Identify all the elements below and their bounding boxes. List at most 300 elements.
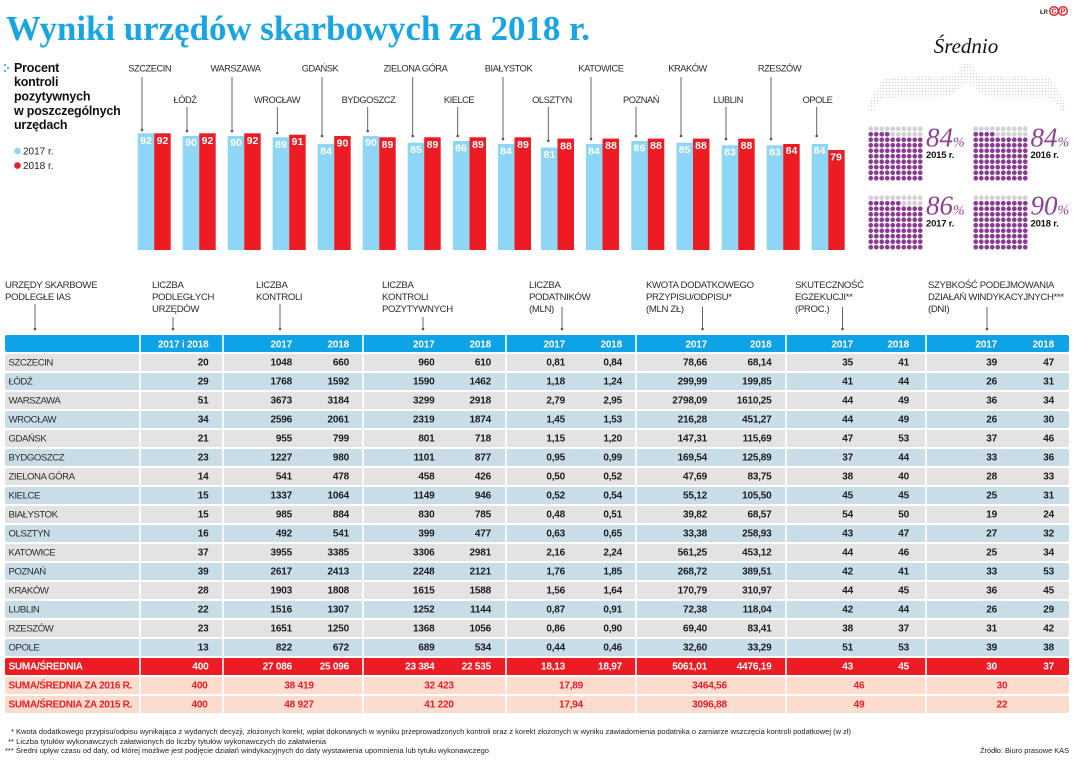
row: Białystok: 985: [276, 510, 293, 520]
row: total: 18,13: [541, 662, 566, 672]
row: Rzeszów: 1651: [271, 624, 293, 634]
row: Wrocław: WROCŁAW: [8, 414, 58, 426]
row: Rzeszów: 38: [842, 624, 854, 634]
row: Katowice: 2,16: [546, 548, 566, 558]
column headings: KWOTA DODATKOWEGO: [646, 280, 754, 291]
row: Warszawa: 2918: [470, 396, 492, 406]
row: Rzeszów: 1056: [470, 624, 492, 634]
row: Warszawa: 36: [986, 396, 998, 406]
row: Olsztyn: 399: [418, 528, 435, 540]
row: Zielona Góra: 33: [1043, 472, 1055, 482]
row: Katowice: 25: [986, 548, 998, 558]
table header row: 2017 i 2018: [158, 340, 209, 350]
row: Olsztyn: 27: [986, 528, 998, 540]
row: Katowice: 2981: [470, 548, 492, 558]
table header row: 2018: [888, 340, 910, 350]
row: Lublin: 42: [842, 604, 854, 616]
bars: Łódź: 92: [202, 135, 213, 147]
row: Warszawa: 3299: [413, 396, 435, 406]
row: Rzeszów: 1250: [328, 624, 350, 634]
row: Białystok: 24: [1043, 510, 1055, 520]
row: Łódź: 1,18: [546, 376, 566, 388]
footnotes: *** Średni upływ czasu od daty, od której możliwe jest podjęcie działań windykacyjnych do daty wystawienia upomnienia lub tytułu wykonawczego: [5, 746, 489, 755]
row: Rzeszów: 42: [1043, 624, 1055, 634]
city labels: BYDGOSZCZ: [342, 95, 396, 105]
row: total: 4476,19: [737, 662, 772, 672]
row: total 2016: [8, 678, 1008, 692]
row: Zielona Góra: 478: [333, 472, 350, 482]
bars: Szczecin: 92: [157, 135, 168, 147]
row: total 2016: 46: [854, 680, 865, 692]
row: total 2016: 38 419: [284, 680, 314, 692]
row: Bydgoszcz: 23: [198, 452, 209, 464]
row: Szczecin: 660: [333, 358, 350, 368]
row: total 2016: 400: [191, 680, 208, 692]
bars: Olsztyn: [541, 139, 574, 250]
row: total: SUMA/ŚREDNIA: [8, 660, 83, 672]
column headings: LICZBA: [152, 280, 184, 291]
row: Poznań: 41: [898, 566, 910, 578]
row: Katowice: KATOWICE: [8, 548, 55, 558]
row: Wrocław: 1874: [470, 414, 492, 426]
row: Kielce: KIELCE: [8, 490, 40, 502]
row: Warszawa: 51: [198, 396, 209, 406]
column headings: [5, 279, 1064, 315]
row: Katowice: 44: [842, 548, 854, 558]
row: Gdańsk: 53: [898, 434, 910, 444]
column headings: LICZBA: [256, 280, 288, 291]
bars: Katowice: [586, 139, 619, 250]
row: total: [8, 660, 1055, 672]
row: total 2016: SUMA/ŚREDNIA ZA 2016 R.: [8, 678, 133, 692]
row: Olsztyn: 16: [198, 528, 209, 540]
row: Kielce: 1149: [414, 490, 435, 502]
row: Opole: 672: [333, 642, 350, 654]
row: Rzeszów: 69,40: [683, 624, 708, 634]
row: Kraków: 1588: [470, 586, 492, 596]
row: Opole: 13: [198, 642, 209, 654]
row: Szczecin: 1048: [271, 358, 293, 368]
row: Warszawa: 1610,25: [737, 396, 772, 406]
row: total: 22 535: [462, 662, 492, 672]
row: Szczecin: 610: [475, 358, 492, 368]
city labels: BIAŁYSTOK: [485, 64, 533, 74]
row: Szczecin: 41: [898, 358, 910, 368]
table header row: 2017: [413, 340, 435, 350]
row: Bydgoszcz: 0,95: [546, 452, 566, 464]
row: Białystok: [8, 510, 1055, 520]
bars: Opole: 84: [814, 145, 825, 157]
row: Opole: 51: [842, 642, 854, 654]
row: Wrocław: 2319: [413, 414, 435, 426]
row: Wrocław: 44: [842, 414, 854, 426]
bars: Rzeszów: [767, 144, 800, 250]
column headings: (PROC.): [795, 304, 829, 315]
row: Kraków: 1,56: [546, 586, 566, 596]
row: Łódź: ŁÓDŹ: [8, 376, 33, 388]
row: Łódź: 199,85: [742, 376, 772, 388]
bars: Lublin: [722, 139, 755, 250]
row: Gdańsk: 37: [986, 434, 998, 444]
row: Zielona Góra: 0,50: [546, 472, 566, 482]
row: total 2016: 3464,56: [692, 680, 728, 692]
row: Kraków: 1,64: [603, 586, 623, 596]
row: Gdańsk: 147,31: [678, 434, 708, 444]
row: Lublin: 0,87: [546, 604, 566, 616]
row: total 2015: 49: [854, 700, 865, 710]
bars: Wrocław: 91: [292, 136, 303, 148]
row: Olsztyn: 47: [898, 528, 910, 540]
row: Kielce: 0,54: [603, 490, 623, 502]
city labels: RZESZÓW: [758, 64, 802, 74]
row: Olsztyn: 541: [333, 528, 350, 540]
bars: Warszawa: [228, 133, 261, 250]
bars: Łódź: [183, 133, 216, 250]
row: Olsztyn: 0,65: [603, 528, 623, 540]
row: Wrocław: 1,53: [603, 414, 623, 426]
row: Gdańsk: 46: [1043, 434, 1055, 444]
bars: Bydgoszcz: [363, 136, 396, 250]
row: Łódź: 31: [1043, 376, 1055, 388]
averages heading: Średnio: [934, 34, 998, 58]
column headings: SZYBKOŚĆ PODEJMOWANIA: [928, 279, 1055, 291]
row: Wrocław: 1,45: [546, 414, 566, 426]
row: total: 23 384: [405, 662, 435, 672]
row: Łódź: 299,99: [678, 376, 708, 388]
value 2018: 90%: [1030, 190, 1069, 220]
bars: Rzeszów: 83: [769, 146, 781, 158]
row: Katowice: 453,12: [742, 548, 772, 558]
value 2016: 84%: [1030, 122, 1069, 152]
row: Poznań: 2617: [271, 566, 293, 578]
row: Zielona Góra: [8, 472, 1055, 482]
city labels: SZCZECIN: [128, 64, 171, 74]
row: total 2015: 22: [997, 700, 1008, 710]
row: Katowice: [8, 548, 1055, 558]
row: Białystok: 785: [475, 510, 492, 520]
row: Szczecin: 35: [842, 358, 854, 368]
row: Bydgoszcz: 37: [842, 452, 854, 464]
row: Rzeszów: 0,86: [546, 624, 566, 634]
bars: Lublin: 83: [724, 146, 736, 158]
row: total 2015: 17,94: [559, 700, 584, 710]
waffle 2016: [973, 126, 1028, 181]
row: total 2016: 30: [997, 680, 1008, 692]
row: Wrocław: 30: [1043, 414, 1055, 426]
row: Kielce: [8, 490, 1055, 502]
column headings: PODATNIKÓW: [529, 292, 592, 303]
row: Wrocław: 2596: [271, 414, 293, 426]
row: Poznań: 42: [842, 566, 854, 578]
row: Rzeszów: 1368: [413, 624, 435, 634]
row: Katowice: 3385: [328, 548, 350, 558]
table header row: 2017: [686, 340, 708, 350]
row: Olsztyn: 0,63: [546, 528, 566, 540]
city labels: KRAKÓW: [668, 64, 707, 74]
row: Rzeszów: [8, 624, 1055, 634]
table header row: 2018: [750, 340, 772, 350]
bars: Zielona Góra: 89: [427, 139, 438, 151]
bars: Katowice: 84: [588, 146, 600, 158]
city leader lines: [141, 77, 818, 142]
chart heading: pozytywnych: [14, 90, 90, 104]
row: Wrocław: 2061: [328, 414, 350, 426]
row: Bydgoszcz: BYDGOSZCZ: [8, 452, 65, 464]
row: Szczecin: 47: [1043, 358, 1055, 368]
row: Poznań: 2121: [470, 566, 492, 578]
row: Lublin: 26: [986, 604, 998, 616]
row: Olsztyn: 258,93: [742, 528, 772, 540]
row: Poznań: 268,72: [678, 566, 708, 578]
column headings: EGZEKUCJI**: [795, 292, 853, 303]
row: Katowice: 46: [898, 548, 910, 558]
row: Lublin: 1144: [470, 604, 492, 616]
row: Zielona Góra: 458: [418, 472, 435, 482]
row: Gdańsk: [8, 434, 1055, 444]
row: Lublin: 1307: [328, 604, 350, 616]
row: Olsztyn: 33,38: [683, 528, 708, 540]
row: Opole: 53: [898, 642, 910, 654]
row: Opole: 689: [418, 642, 435, 654]
value 2017: 86%: [926, 190, 965, 220]
row: Wrocław: 451,27: [742, 414, 772, 426]
bars: Szczecin: [138, 133, 171, 250]
value 2015: 84%: [926, 122, 965, 152]
row: Białystok: BIAŁYSTOK: [8, 510, 59, 520]
row: Kraków: 170,79: [678, 586, 708, 596]
data table: [5, 335, 1069, 713]
table header row: 2018: [601, 340, 623, 350]
row: Kielce: 55,12: [683, 490, 708, 502]
row: Poznań: 53: [1043, 566, 1055, 578]
row: Białystok: 830: [418, 510, 435, 520]
bars: Gdańsk: [318, 136, 351, 250]
row: Katowice: 3955: [271, 548, 293, 558]
row: Bydgoszcz: 33: [986, 452, 998, 464]
column headings: PODLEGŁYCH: [152, 292, 214, 303]
row: Bydgoszcz: 877: [475, 452, 492, 464]
row: Kraków: [8, 586, 1055, 596]
row: Gdańsk: 1,15: [546, 434, 566, 444]
row: Szczecin: 68,14: [747, 358, 772, 368]
row: total: 27 086: [263, 662, 293, 672]
chart heading: w poszczególnych: [13, 104, 121, 118]
column headings: LICZBA: [382, 280, 414, 291]
row: total: 30: [986, 662, 998, 672]
city labels: OPOLE: [803, 95, 833, 105]
row: Rzeszów: 37: [898, 624, 910, 634]
row: Lublin: 72,38: [683, 604, 708, 616]
row: Bydgoszcz: 169,54: [678, 452, 708, 464]
bars: Olsztyn: 81: [544, 149, 555, 161]
waffle 2018: [973, 195, 1028, 250]
row: Opole: 38: [1043, 642, 1055, 654]
row: Szczecin: 78,66: [683, 358, 708, 368]
city labels: LUBLIN: [713, 95, 743, 105]
row: Lublin: 1516: [271, 604, 293, 616]
bars: Warszawa: 92: [247, 135, 258, 147]
row: Kielce: 105,50: [742, 490, 772, 502]
row: Gdańsk: 955: [276, 434, 293, 444]
row: Lublin: 1252: [413, 604, 435, 616]
table header row: 2017: [271, 340, 293, 350]
row: Opole: 39: [986, 642, 998, 654]
row: total 2016: 17,89: [559, 680, 584, 692]
row: Poznań: POZNAŃ: [8, 566, 46, 578]
column headings: SKUTECZNOŚĆ: [795, 279, 864, 291]
bars: Kielce: 89: [472, 139, 484, 151]
row: Olsztyn: 477: [475, 528, 492, 540]
row: Szczecin: SZCZECIN: [8, 358, 53, 368]
bars: Wrocław: [273, 135, 306, 250]
row: Rzeszów: 23: [198, 624, 209, 634]
chart heading: Procent: [14, 61, 60, 75]
row: Kielce: 15: [198, 490, 209, 502]
row: Lublin: 118,04: [743, 604, 772, 616]
row: Olsztyn: 32: [1043, 528, 1055, 540]
row: Rzeszów: 83,41: [747, 624, 772, 634]
chart heading: [4, 61, 121, 132]
row: Wrocław: [8, 414, 1055, 426]
row: Białystok: 54: [842, 510, 854, 520]
row: Białystok: 0,48: [546, 510, 566, 520]
row: Rzeszów: 31: [986, 624, 998, 634]
row: Łódź: 44: [898, 376, 910, 388]
bars: Poznań: [631, 139, 664, 250]
row: Łódź: 1462: [470, 376, 492, 388]
value 2015: 2015 r.: [926, 150, 954, 161]
row: Gdańsk: 1,20: [603, 434, 623, 444]
legend: 2018 r.: [23, 161, 54, 172]
row: Kraków: 45: [1043, 586, 1055, 596]
row: Bydgoszcz: 125,89: [742, 452, 772, 464]
row: Lublin: 0,91: [603, 604, 623, 616]
row: Gdańsk: 21: [198, 434, 209, 444]
row: Opole: 32,60: [683, 642, 708, 654]
row: total: 45: [898, 662, 910, 672]
footnotes: ** Liczba tytułów wykonawczych załatwionych do liczby tytułów wykonawczych do załatwienia: [8, 737, 327, 746]
row: Kielce: 25: [986, 490, 998, 502]
row: Kielce: 0,52: [546, 490, 566, 502]
row: total 2015: [8, 698, 1008, 710]
row: Kraków: 36: [986, 586, 998, 596]
row: Lublin: LUBLIN: [8, 604, 40, 616]
row: Katowice: 2,24: [603, 548, 623, 558]
city labels: ZIELONA GÓRA: [384, 64, 449, 74]
city labels: GDAŃSK: [302, 64, 340, 74]
row: Warszawa: WARSZAWA: [8, 396, 61, 406]
row: Kielce: 946: [475, 490, 492, 502]
city labels: KIELCE: [444, 95, 474, 105]
row: Zielona Góra: 47,69: [683, 472, 708, 482]
city labels: ŁÓDŹ: [174, 95, 197, 105]
row: Warszawa: [8, 396, 1055, 406]
table row backgrounds: [5, 335, 1069, 713]
footnotes: [5, 727, 851, 755]
row: total 2015: 3096,88: [692, 700, 728, 710]
row: Kraków: KRAKÓW: [8, 586, 50, 596]
column headings: LICZBA: [529, 280, 561, 291]
bars: Bydgoszcz: 90: [365, 137, 377, 149]
row: Opole: OPOLE: [8, 642, 39, 654]
bars: Białystok: 84: [500, 146, 512, 158]
bars: Poznań: 88: [650, 140, 662, 152]
row: Poznań: 33: [986, 566, 998, 578]
row: Kraków: 44: [842, 586, 854, 596]
row: Zielona Góra: 426: [475, 472, 492, 482]
row: Łódź: 1590: [413, 376, 435, 388]
row: Zielona Góra: ZIELONA GÓRA: [8, 472, 76, 482]
row: Katowice: 37: [198, 548, 209, 558]
city labels: KATOWICE: [578, 64, 624, 74]
row: Łódź: 29: [198, 376, 209, 388]
row: Szczecin: 39: [986, 358, 998, 368]
logo: ŁR: [1040, 10, 1049, 16]
row: Olsztyn: 492: [276, 528, 293, 540]
row: Kraków: 1903: [271, 586, 293, 596]
row: Białystok: 68,57: [747, 510, 772, 520]
legend: [14, 146, 54, 172]
row: total 2015: 48 927: [284, 700, 314, 710]
column headings: PRZYPISU/ODPISU*: [646, 292, 732, 303]
row: Warszawa: 2,79: [546, 396, 566, 406]
chart heading: kontroli: [14, 75, 58, 89]
row: Gdańsk: GDAŃSK: [8, 434, 47, 444]
column headings: (DNI): [928, 304, 949, 315]
row: Gdańsk: 47: [842, 434, 854, 444]
row: Kielce: 45: [842, 490, 854, 502]
row: Łódź: 41: [842, 376, 854, 388]
row: Kielce: 1337: [271, 490, 293, 502]
row: Wrocław: 34: [198, 414, 209, 426]
row: Katowice: 561,25: [678, 548, 708, 558]
row: Bydgoszcz: 980: [333, 452, 350, 464]
row: Łódź: [8, 376, 1055, 388]
column headings: URZĘDÓW: [152, 304, 200, 315]
row: Wrocław: 26: [986, 414, 998, 426]
bars: Gdańsk: 90: [337, 138, 348, 150]
bars: Opole: 79: [830, 152, 842, 164]
row: Szczecin: 0,84: [603, 358, 623, 368]
row: Zielona Góra: 14: [198, 472, 209, 482]
row: Lublin: 44: [898, 604, 910, 616]
row: Gdańsk: 801: [418, 434, 435, 444]
value 2017: 2017 r.: [926, 218, 954, 230]
row: Wrocław: 216,28: [678, 414, 708, 426]
bars: Katowice: 88: [605, 140, 617, 152]
city labels: WARSZAWA: [210, 64, 262, 74]
bars: Kielce: [453, 137, 486, 250]
row: Opole: 822: [276, 642, 293, 654]
bars: Gdańsk: 84: [320, 146, 332, 158]
row: Opole: 0,44: [546, 642, 566, 654]
row: Białystok: 15: [198, 510, 209, 520]
table header row: 2017: [976, 340, 998, 350]
row: Warszawa: 2798,09: [672, 396, 708, 406]
row: total: 25 096: [320, 662, 350, 672]
row: total 2015: 400: [191, 700, 208, 710]
row: Warszawa: 49: [898, 396, 910, 406]
row: Opole: [8, 642, 1055, 654]
row: Rzeszów: 0,90: [603, 624, 623, 634]
table header row: 2018: [1033, 340, 1055, 350]
logo: [1040, 7, 1067, 16]
row: Bydgoszcz: 0,99: [603, 452, 623, 464]
row: Poznań: 2248: [413, 566, 435, 578]
row: Gdańsk: 718: [475, 434, 492, 444]
row: total 2016: 32 423: [424, 680, 454, 692]
bars: Poznań: 86: [634, 142, 645, 154]
